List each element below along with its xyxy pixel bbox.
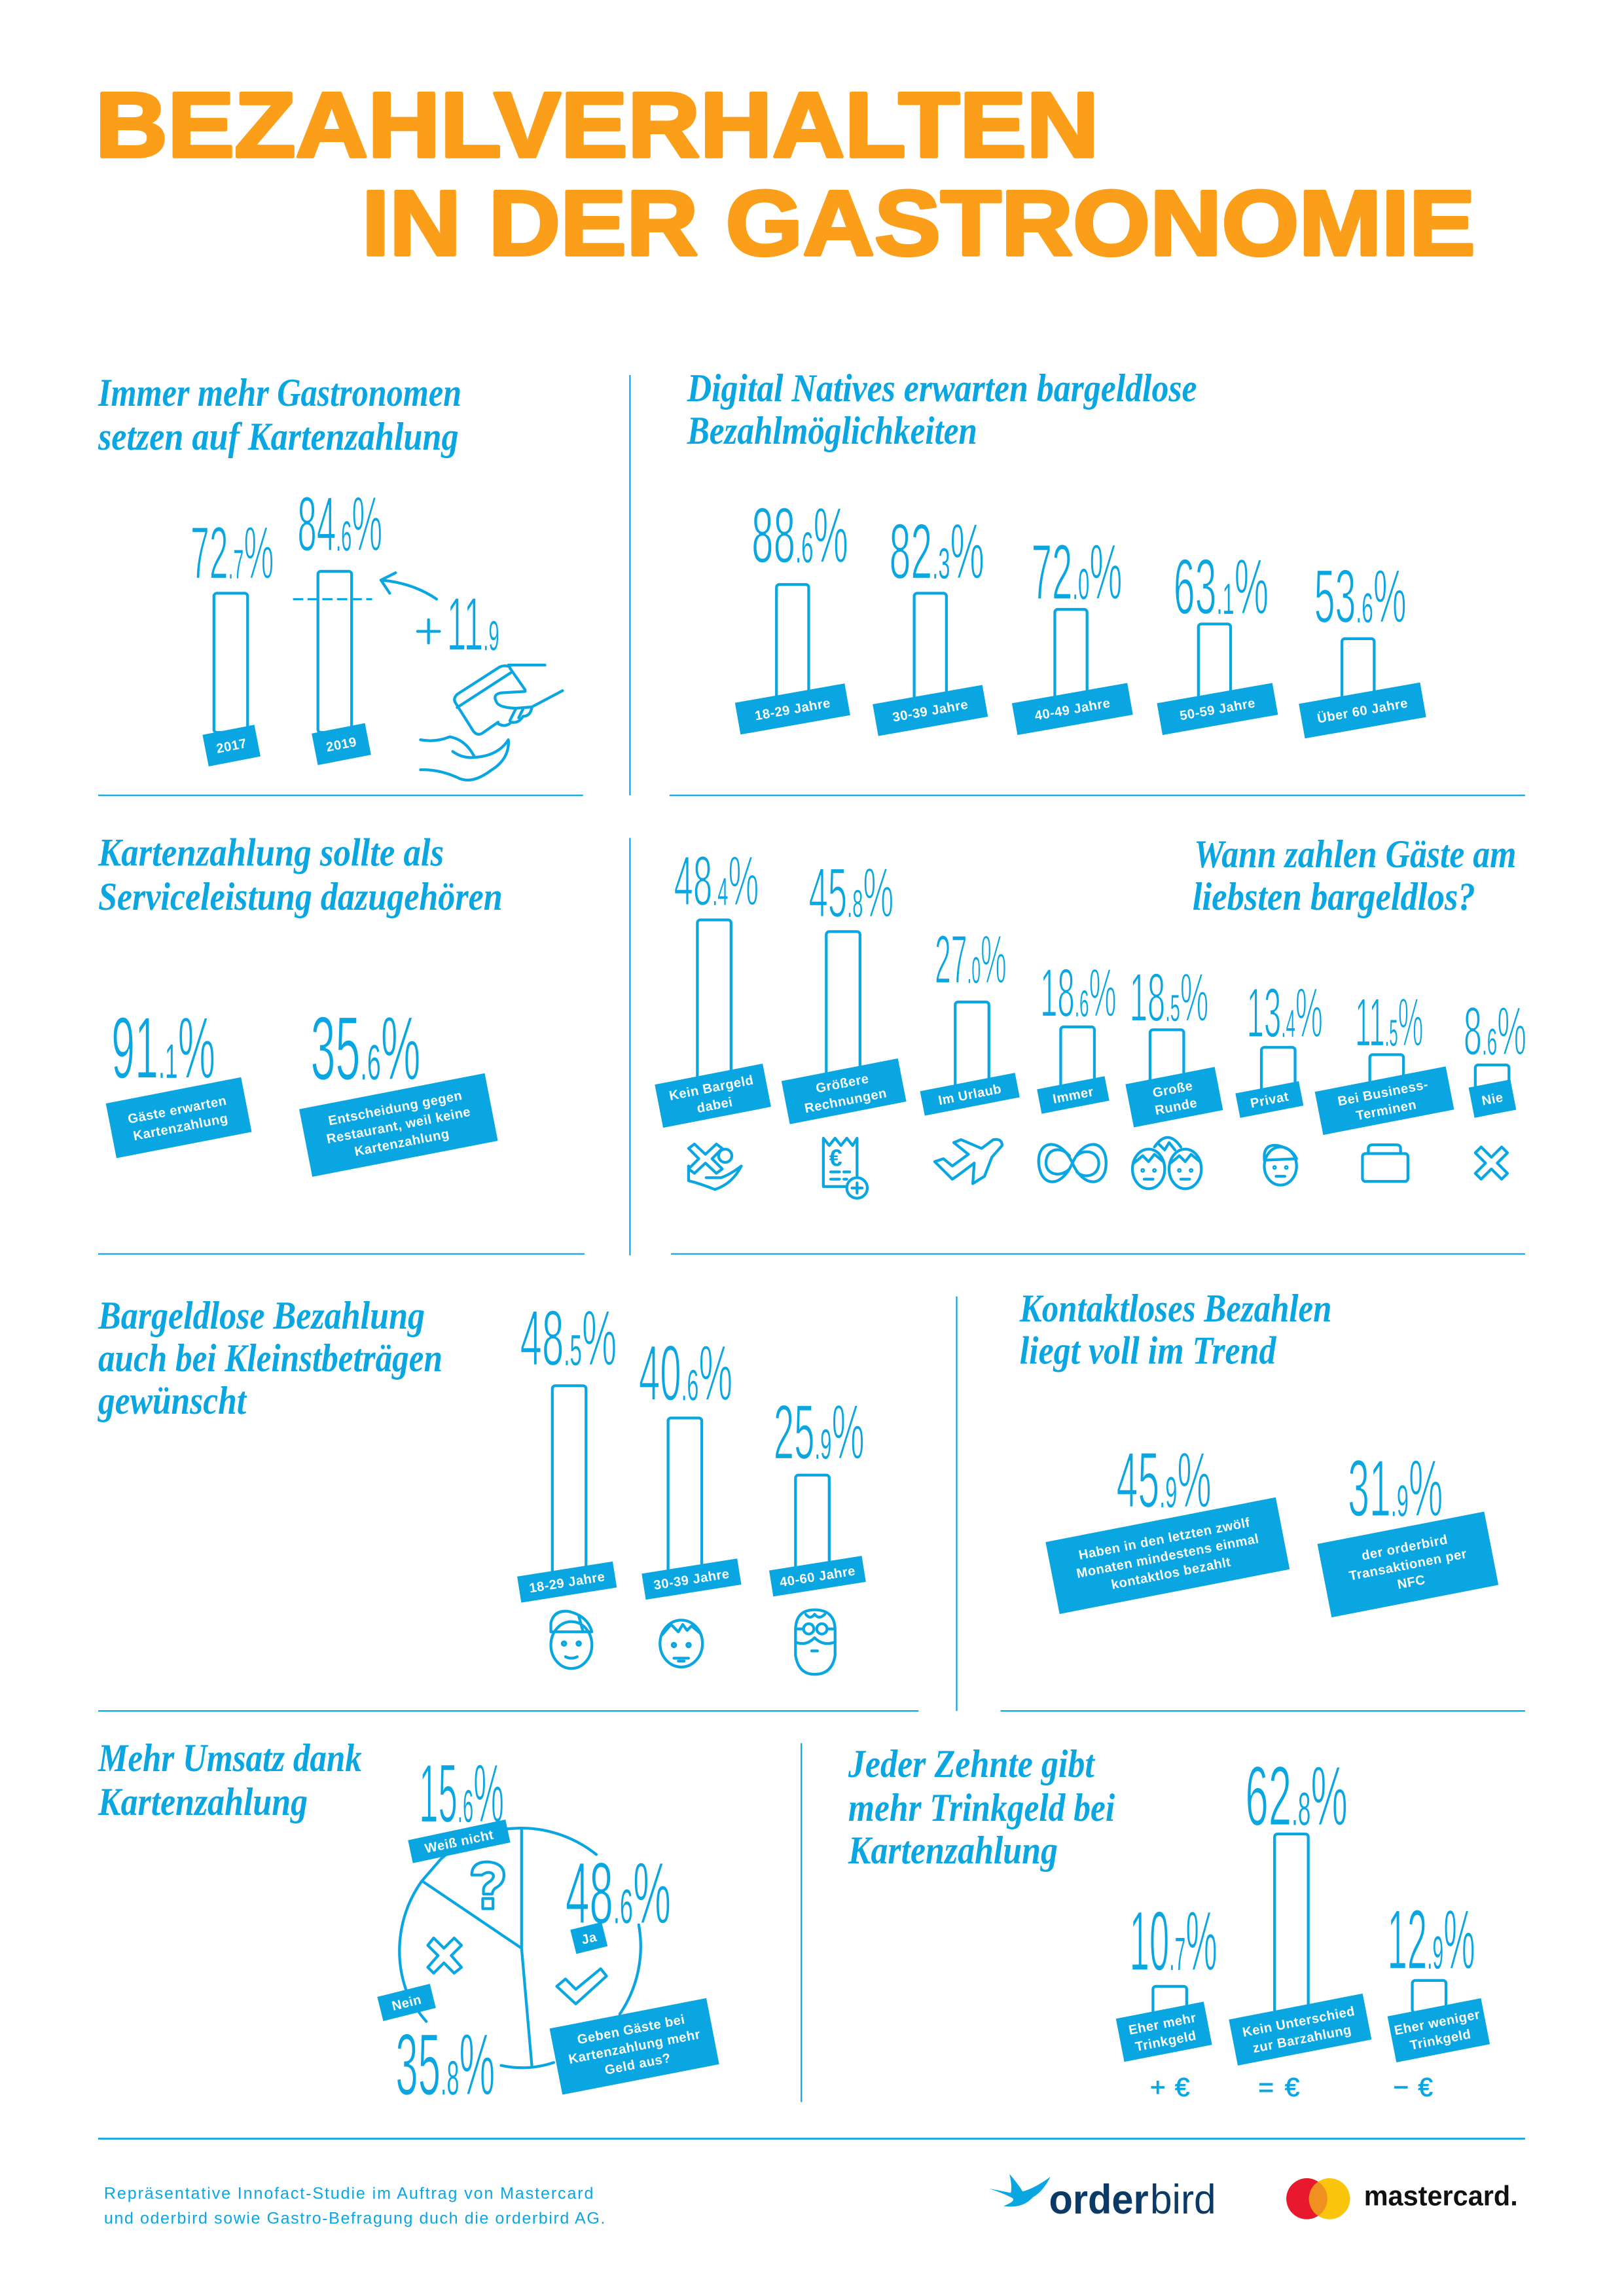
heading: liegt voll im Trend <box>1020 1329 1276 1373</box>
bar: Eher weniger Trinkgeld: Eher weniger <box>1393 2007 1481 2038</box>
panel: Kleinstbeträge <box>97 1294 866 1674</box>
bar 30-39 <box>873 508 988 736</box>
bar: Große Runde: Große <box>1151 1079 1194 1101</box>
stat 45.9%: kontaktlos bezahlt <box>1110 1555 1232 1592</box>
heading: Serviceleistung dazugehören <box>98 875 503 919</box>
bar: Nie: Nie <box>1481 1090 1505 1109</box>
stat 91.1%: 91.1% <box>111 999 215 1098</box>
bar: Bei Business-Terminen: Terminen <box>1355 1098 1418 1123</box>
bar: Eher mehr Trinkgeld: Eher mehr <box>1128 2011 1197 2038</box>
heading: auch bei Kleinstbeträgen <box>98 1336 442 1380</box>
bar 40-60 <box>769 1389 866 1596</box>
bar: Eher mehr Trinkgeld: Trinkgeld <box>1134 2028 1198 2054</box>
bar 40-60: 25.9% <box>774 1389 865 1476</box>
bar: Nie: 8.6% <box>1464 993 1526 1069</box>
bar 30-39: 40.6% <box>639 1329 732 1418</box>
bar 2017: 72.7% <box>190 511 274 595</box>
icon: airplane <box>935 1139 1002 1183</box>
heading: liebsten bargeldlos? <box>1193 875 1475 919</box>
bar: Kein Bargeld dabei: 48.4% <box>674 841 759 920</box>
bar: Immer <box>1037 955 1117 1114</box>
footer note: und oderbird sowie Gastro-Befragung duch die orderbird AG. <box>104 2209 605 2227</box>
bar: Kein Unterschied: 62.8% <box>1245 1748 1348 1844</box>
bar: Große Runde: 18.5% <box>1130 960 1208 1036</box>
icon: receipt: € <box>829 1145 842 1172</box>
bar: Bei Business-Terminen: 11.5% <box>1355 984 1423 1062</box>
heading: Kartenzahlung <box>848 1829 1058 1873</box>
bar: Kein Unterschied: zur Barzahlung <box>1252 2022 1353 2056</box>
icon: briefcase <box>1362 1145 1408 1181</box>
stat 45.9%: Haben in den letzten zwölf <box>1077 1515 1252 1563</box>
logo: mastercard: mastercard. <box>1364 2181 1518 2212</box>
logo: mastercard <box>1286 2178 1518 2219</box>
bar: Bei Business-Terminen <box>1315 984 1454 1135</box>
stat 31.9% <box>1318 1444 1498 1617</box>
panel: Immer mehr Gastronomen <box>98 371 562 780</box>
stat 35.6% <box>299 998 498 1177</box>
icon: check <box>557 1969 607 2004</box>
bar 18-29: 88.6% <box>751 492 848 580</box>
bar: Immer: 18.6% <box>1040 955 1117 1031</box>
bar 60+ <box>1299 554 1426 738</box>
stat 91.1%: Kartenzahlung <box>132 1111 229 1143</box>
arrow: plus 11.9 <box>381 573 499 667</box>
icon: X <box>1475 1147 1507 1179</box>
icon: adult face <box>660 1620 702 1667</box>
bar: Größere Rechnungen: Größere <box>815 1071 870 1096</box>
heading: Jeder Zehnte gibt <box>848 1742 1096 1786</box>
bar: Kein Bargeld dabei <box>655 841 771 1128</box>
icon: hand with x and coin <box>689 1144 742 1189</box>
bar: Im Urlaub: Im Urlaub <box>937 1082 1003 1108</box>
label: Weiß nicht 15.6%: Weiß nicht <box>424 1828 495 1856</box>
logo: orderbird: order <box>1049 2177 1149 2223</box>
bar: Kein Bargeld dabei: dabei <box>696 1095 734 1116</box>
bar: Immer: Immer <box>1052 1085 1095 1107</box>
bar 50-59: 50-59 Jahre <box>1179 696 1257 723</box>
stat 35.6%: Kartenzahlung <box>353 1127 450 1159</box>
bar 2017: 2017 <box>215 736 248 757</box>
bar: Kein Unterschied: Kein Unterschied <box>1241 2004 1356 2040</box>
bar: Eher weniger Trinkgeld <box>1388 1893 1490 2102</box>
bar 30-39: 82.3% <box>890 508 984 596</box>
bar: Große Runde <box>1125 960 1223 1128</box>
bar: Im Urlaub: 27.0% <box>935 922 1007 998</box>
heading: Mehr Umsatz dank <box>98 1736 362 1780</box>
heading: Kontaktloses Bezahlen <box>1019 1287 1331 1331</box>
bar 40-49: 72.0% <box>1032 528 1122 616</box>
bar 2019 <box>293 482 382 765</box>
icon: infinity <box>1039 1144 1106 1182</box>
bar 18-29: 18-29 Jahre <box>754 696 832 723</box>
title: IN DER GASTRONOMIE <box>362 171 1475 274</box>
icon: question mark <box>472 1862 504 1909</box>
heading: Wann zahlen Gäste am <box>1194 833 1516 876</box>
panel: Mehr Umsatz dank Kartenzahlung <box>98 1736 719 2114</box>
stat 91.1%: Gäste erwarten <box>127 1094 228 1127</box>
logo: orderbird: bird <box>1150 2177 1216 2223</box>
bar 40-49 <box>1012 528 1133 735</box>
callout: Geben Gäste bei <box>576 2013 686 2047</box>
panel: Kontaktloses Bezahlen <box>1019 1287 1498 1617</box>
bar: Eher weniger Trinkgeld: −€ <box>1393 2073 1433 2102</box>
label: Ja 48.6%: 48.6% <box>566 1844 671 1943</box>
title: BEZAHLVERHALTEN <box>96 73 1099 176</box>
heading: mehr Trinkgeld bei <box>848 1786 1115 1830</box>
bar 60+: Über 60 Jahre <box>1316 696 1409 726</box>
heading: Bargeldlose Bezahlung <box>98 1294 425 1338</box>
panel: Wann zahlen Gäste am liebsten bargeldlos <box>655 833 1526 1198</box>
label: Nein 35.8%: Nein <box>390 1992 423 2014</box>
bar: Große Runde: Runde <box>1154 1096 1199 1118</box>
callout: Geld aus? <box>604 2051 672 2078</box>
bar: Eher weniger Trinkgeld: Trinkgeld <box>1409 2027 1472 2053</box>
bar 50-59 <box>1157 543 1278 735</box>
bar: Privat <box>1235 973 1323 1118</box>
bar 40-49: 40-49 Jahre <box>1034 696 1111 723</box>
heading: Digital Natives erwarten bargeldlose <box>687 367 1197 410</box>
bar: Größere Rechnungen: 45.8% <box>808 853 893 932</box>
bar: Eher mehr Trinkgeld: 10.7% <box>1130 1894 1218 1989</box>
stat 91.1% <box>106 999 251 1158</box>
stat 45.9% <box>1045 1437 1290 1614</box>
icon: face with cap <box>1265 1145 1297 1185</box>
panel: Kartenzahlung als Serviceleistung <box>98 831 503 1177</box>
icon: receipt <box>823 1138 867 1198</box>
bar 40-60: 40-60 Jahre <box>779 1564 857 1590</box>
bar: Privat: Privat <box>1249 1090 1290 1111</box>
label: Nein 35.8%: 35.8% <box>395 2016 495 2114</box>
bar: Eher weniger Trinkgeld: 12.9% <box>1388 1893 1475 1988</box>
bar 2017 <box>190 511 274 766</box>
callout <box>550 1998 719 2094</box>
bar: Eher mehr Trinkgeld: +€ <box>1150 2073 1189 2102</box>
bar: Im Urlaub <box>920 922 1020 1116</box>
bar: Bei Business-Terminen: Bei Business- <box>1337 1077 1430 1109</box>
bar: Nie <box>1464 993 1526 1118</box>
icon: cross <box>428 1938 461 1973</box>
footer note: Repräsentative Innofact-Studie im Auftrag von Mastercard <box>104 2184 593 2202</box>
callout: Kartenzahlung mehr <box>568 2027 702 2067</box>
bar: Größere Rechnungen: Rechnungen <box>803 1086 888 1116</box>
icon: group of faces <box>1132 1138 1201 1189</box>
panel: Jeder Zehnte gibt mehr Trinkgeld <box>848 1742 1490 2102</box>
bar: Kein Unterschied: =€ <box>1259 2073 1299 2102</box>
bar 60+: 53.6% <box>1314 554 1407 639</box>
heading: Kartenzahlung <box>98 1780 308 1824</box>
pie chart <box>377 1747 719 2114</box>
stat 31.9%: Transaktionen per <box>1348 1547 1468 1584</box>
heading: gewünscht <box>97 1379 247 1423</box>
label: Weiß nicht 15.6% <box>408 1747 511 1863</box>
bar: Privat: 13.4% <box>1247 973 1323 1052</box>
heading: Immer mehr Gastronomen <box>98 371 461 415</box>
stat 31.9%: 31.9% <box>1348 1444 1443 1534</box>
icon: young face with cap <box>551 1611 592 1668</box>
arrow: plus 11.9: 11.9 <box>447 583 499 667</box>
bar 50-59: 63.1% <box>1174 543 1269 631</box>
bar: Eher mehr Trinkgeld <box>1116 1894 1218 2102</box>
stat 45.9%: 45.9% <box>1116 1437 1212 1525</box>
bar 30-39: 30-39 Jahre <box>653 1567 731 1593</box>
stat 35.6%: 35.6% <box>311 998 420 1100</box>
stat 31.9%: NFC <box>1396 1573 1426 1592</box>
bar 30-39: 30-39 Jahre <box>892 698 969 725</box>
bar: Kein Unterschied <box>1229 1748 1371 2102</box>
bar 18-29: 18-29 Jahre <box>528 1570 606 1596</box>
stat 45.9%: Monaten mindestens einmal <box>1075 1532 1260 1581</box>
label: Weiß nicht 15.6%: 15.6% <box>419 1747 504 1840</box>
bar: Kein Bargeld dabei: Kein Bargeld <box>668 1073 755 1103</box>
bar 18-29 <box>517 1295 617 1603</box>
bar 2019: 84.6% <box>297 482 382 567</box>
title <box>96 73 1475 274</box>
bar 30-39 <box>639 1329 742 1600</box>
heading: Bezahlmöglichkeiten <box>687 409 977 453</box>
logo: orderbird <box>989 2174 1216 2223</box>
bar: Größere Rechnungen <box>782 853 907 1124</box>
stat 35.6%: Restaurant, weil keine <box>325 1105 472 1147</box>
bar 18-29 <box>735 492 850 734</box>
label: Nein 35.8% <box>377 1984 495 2114</box>
stat 31.9%: der orderbird <box>1360 1533 1449 1564</box>
heading: setzen auf Kartenzahlung <box>98 415 459 459</box>
panel: Digital Natives <box>687 367 1426 738</box>
bar 18-29: 48.5% <box>520 1295 617 1383</box>
bar 2019: 2019 <box>325 735 358 755</box>
icon: older face with glasses and beard <box>795 1610 835 1674</box>
stat 35.6%: Entscheidung gegen <box>327 1088 463 1128</box>
heading: Kartenzahlung sollte als <box>98 831 444 875</box>
icon: card in hand <box>420 665 562 780</box>
label: Ja 48.6%: Ja <box>580 1930 598 1948</box>
